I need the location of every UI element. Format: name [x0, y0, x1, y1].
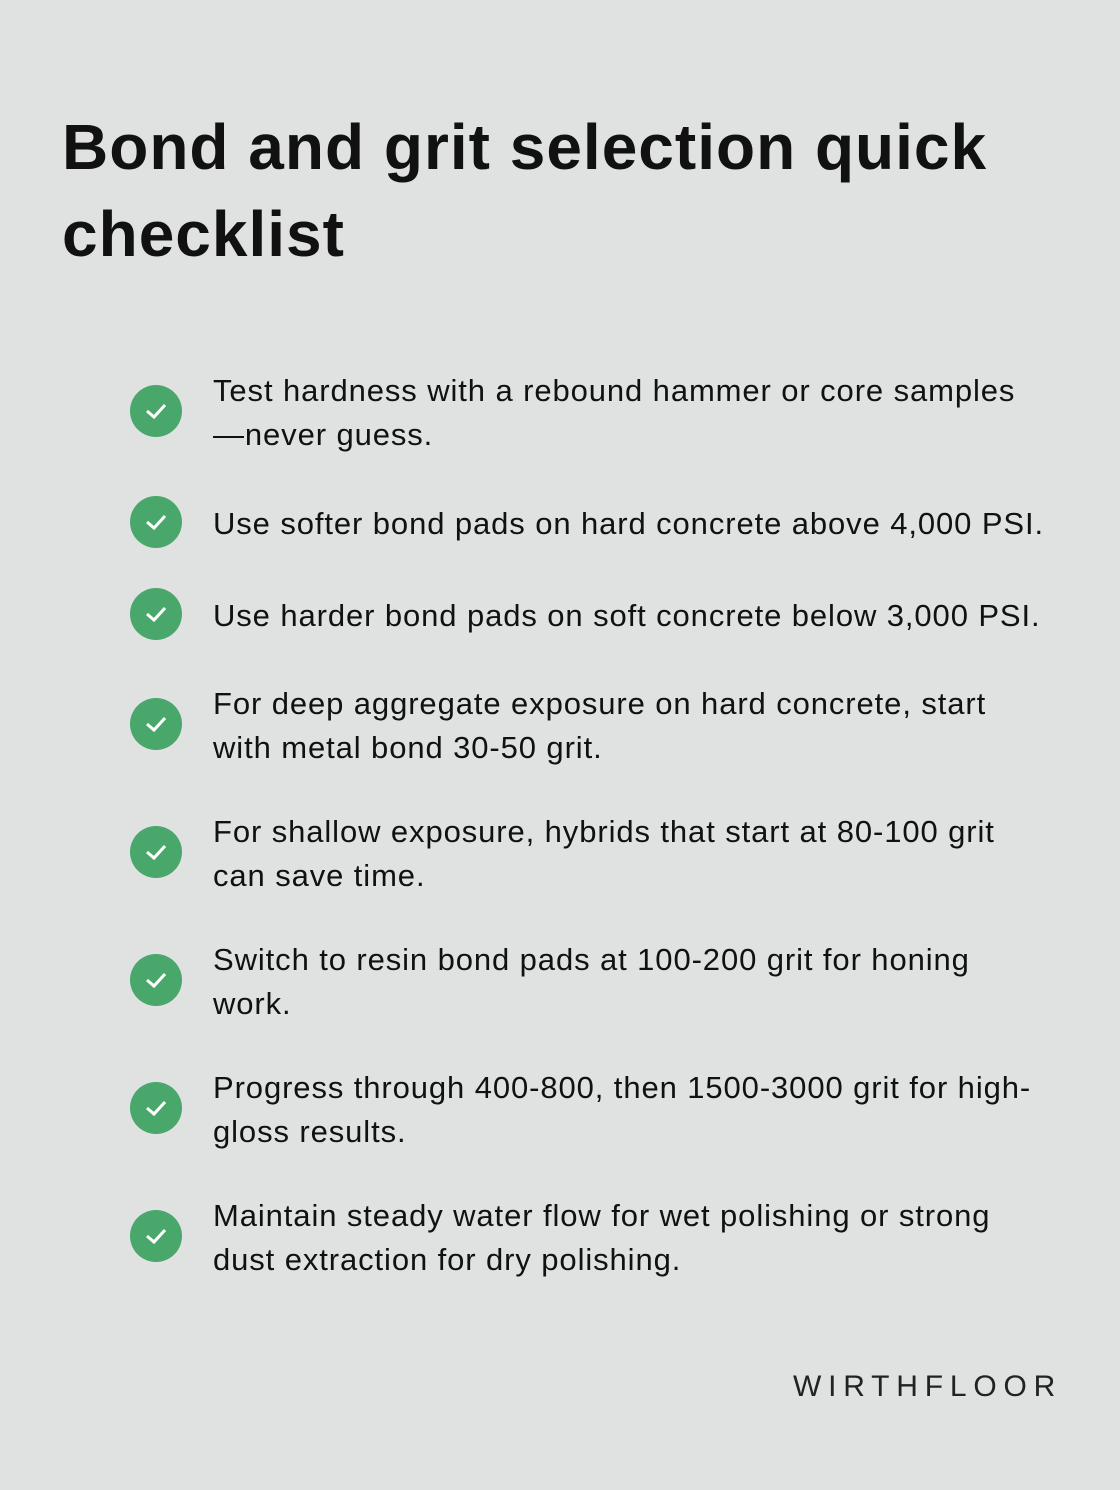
item 2: Use softer bond pads on hard concrete above 4,000 PSI. [213, 506, 1044, 541]
title [62, 111, 987, 270]
item 1 [130, 373, 1015, 452]
item 4 [130, 686, 986, 765]
item 4: with metal bond 30-50 grit. [213, 730, 603, 765]
item 5 [130, 814, 995, 893]
item 3 [130, 588, 1041, 640]
title: Bond and grit selection quick [62, 111, 987, 183]
item 8: Maintain steady water flow for wet polishing or strong [213, 1198, 990, 1233]
item 7: Progress through 400-800, then 1500-3000 grit for high- [213, 1070, 1031, 1105]
item 2 [130, 496, 1044, 548]
item 6: work. [213, 986, 292, 1021]
item 4: For deep aggregate exposure on hard concrete, start [213, 686, 986, 721]
item 7: gloss results. [213, 1114, 406, 1149]
item 6: Switch to resin bond pads at 100-200 grit for honing [213, 942, 970, 977]
item 8 [130, 1198, 990, 1277]
logo: WIRTHFLOOR [793, 1370, 1062, 1403]
item 6 [130, 942, 970, 1021]
item 5: can save time. [213, 858, 425, 893]
item 1: Test hardness with a rebound hammer or core samples [213, 373, 1015, 408]
title: checklist [62, 198, 345, 270]
item 7 [130, 1070, 1031, 1149]
item 5: For shallow exposure, hybrids that start at 80-100 grit [213, 814, 995, 849]
item 8: dust extraction for dry polishing. [213, 1242, 681, 1277]
item 3: Use harder bond pads on soft concrete below 3,000 PSI. [213, 598, 1041, 633]
item 1: —never guess. [213, 417, 433, 452]
